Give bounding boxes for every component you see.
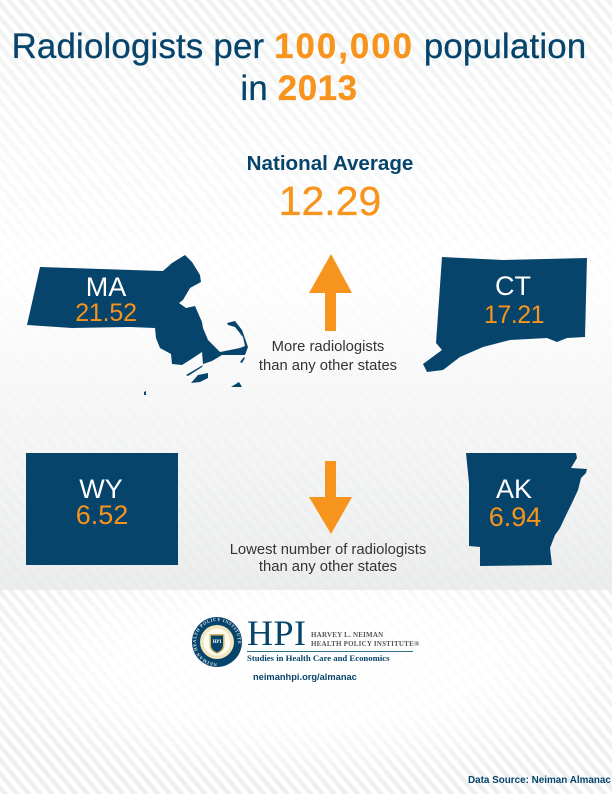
arrow: down bbox=[309, 461, 352, 534]
caption: lowest number: Lowest number of radiologists bbox=[230, 542, 426, 558]
title: Radiologists per 100,000 population bbox=[12, 27, 586, 66]
title bbox=[12, 27, 586, 108]
logo: HPI seal: HPI bbox=[213, 640, 221, 645]
WY value: 6.52 bbox=[76, 500, 128, 530]
MA value: 21.52 bbox=[75, 299, 137, 327]
caption: more radiologists: than any other states bbox=[259, 358, 397, 374]
logo: rule bbox=[247, 651, 413, 652]
arrow: up bbox=[309, 254, 352, 331]
map: Massachusetts bbox=[27, 255, 248, 395]
caption: more radiologists: More radiologists bbox=[272, 339, 384, 355]
WY label: WY bbox=[79, 474, 123, 504]
logo: institute name bbox=[311, 631, 419, 648]
website: neimanhpi.org/almanac bbox=[253, 672, 357, 682]
national average value: 12.29 bbox=[279, 178, 381, 224]
caption: more radiologists bbox=[259, 339, 397, 374]
logo: institute name: HEALTH POLICY INSTITUTE® bbox=[311, 640, 419, 648]
caption: lowest number: than any other states bbox=[259, 559, 397, 575]
MA label: MA bbox=[86, 272, 126, 302]
caption: lowest number bbox=[230, 542, 426, 575]
CT label: CT bbox=[495, 271, 531, 301]
title: in 2013 bbox=[240, 69, 358, 108]
logo: HPI seal: NEIMAN HEALTH POLICY INSTITUTE bbox=[192, 618, 242, 666]
AK label: AK bbox=[496, 474, 532, 504]
map: Wyoming bbox=[26, 453, 178, 565]
logo: tagline: Studies in Health Care and Economics bbox=[247, 653, 389, 663]
AK value: 6.94 bbox=[489, 502, 541, 532]
national average label: National Average bbox=[247, 152, 413, 175]
map: Arkansas bbox=[466, 453, 587, 566]
CT value: 17.21 bbox=[484, 301, 544, 329]
logo: institute name: HARVEY L. NEIMAN bbox=[311, 631, 383, 639]
logo: HPI letters: HPI bbox=[247, 613, 307, 653]
data source: Data Source: Neiman Almanac bbox=[468, 775, 611, 786]
map: Connecticut bbox=[423, 257, 587, 372]
